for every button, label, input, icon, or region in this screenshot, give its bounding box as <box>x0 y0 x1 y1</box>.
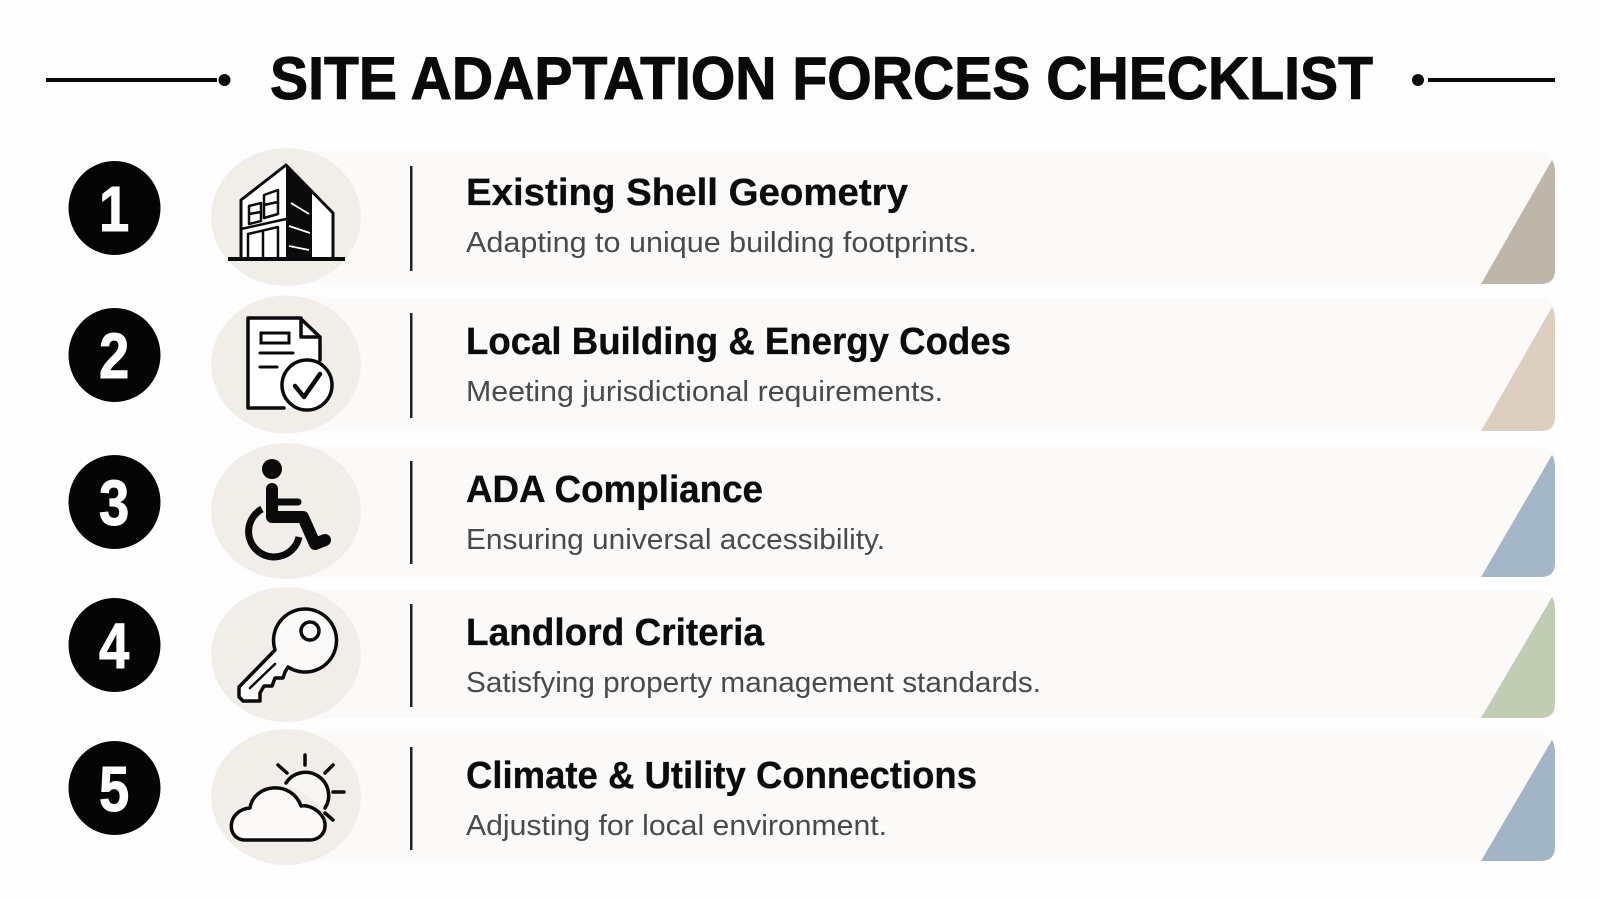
row 2 heading: Local Building & Energy Codes <box>466 321 1011 363</box>
right title rule <box>1412 74 1555 86</box>
row 1 number badge: 1 <box>99 173 129 245</box>
row 4 number badge <box>68 598 160 692</box>
row 5 accent triangle <box>1481 740 1555 861</box>
row 4: landlord criteria <box>68 587 1555 722</box>
row 2 accent triangle <box>1481 307 1555 431</box>
title: SITE ADAPTATION FORCES CHECKLIST <box>270 45 1373 112</box>
row 3: ADA compliance <box>68 443 1555 579</box>
row 2 divider <box>410 313 412 418</box>
row 5 divider <box>410 747 412 850</box>
row 3 divider <box>410 461 412 564</box>
header: title with flanking rules <box>46 45 1555 112</box>
row 5 panel <box>280 733 1555 861</box>
row 3 accent triangle <box>1481 455 1555 577</box>
row 5: climate and utility connections <box>68 729 1555 865</box>
row 3 description: Ensuring universal accessibility. <box>466 524 885 556</box>
icon: wheelchair user <box>249 459 325 557</box>
row 4 heading: Landlord Criteria <box>466 612 765 654</box>
row 5 icon circle <box>211 729 361 865</box>
icon: key <box>239 609 337 701</box>
row 5 heading: Climate & Utility Connections <box>466 755 977 797</box>
row 5 number badge: 5 <box>99 753 129 825</box>
row 2 icon circle <box>211 296 361 434</box>
row 4 divider <box>410 604 412 707</box>
row 1 divider <box>410 166 412 271</box>
row 1 icon circle <box>211 148 361 286</box>
row 5 number badge <box>68 741 160 835</box>
row 1 accent triangle <box>1481 160 1555 284</box>
row 2 number badge: 2 <box>99 320 129 392</box>
row 3 heading: ADA Compliance <box>466 469 763 511</box>
row 4 accent triangle <box>1481 597 1555 718</box>
row 4 icon circle <box>211 587 361 722</box>
row 2 description: Meeting jurisdictional requirements. <box>466 376 943 408</box>
row 1 description: Adapting to unique building footprints. <box>466 227 977 259</box>
row 2 number badge <box>68 308 160 402</box>
row 3 panel <box>280 447 1555 577</box>
row 2 panel <box>280 298 1555 431</box>
row 2: local building and energy codes <box>68 296 1555 434</box>
row 1: existing shell geometry <box>68 148 1555 286</box>
row 5 description: Adjusting for local environment. <box>466 810 887 842</box>
row 4 description: Satisfying property management standards. <box>466 667 1041 699</box>
row 4 number badge: 4 <box>99 610 129 682</box>
icon: building <box>228 165 345 261</box>
row 1 panel <box>280 151 1555 284</box>
row 3 number badge: 3 <box>99 467 129 539</box>
row 1 number badge <box>68 161 160 255</box>
row 4 panel <box>280 590 1555 718</box>
row 3 number badge <box>68 455 160 549</box>
row 1 heading: Existing Shell Geometry <box>466 172 908 214</box>
icon: document with check <box>248 318 332 410</box>
icon: cloud and sun <box>231 755 344 840</box>
row 3 icon circle <box>211 443 361 579</box>
left title rule <box>46 74 230 86</box>
